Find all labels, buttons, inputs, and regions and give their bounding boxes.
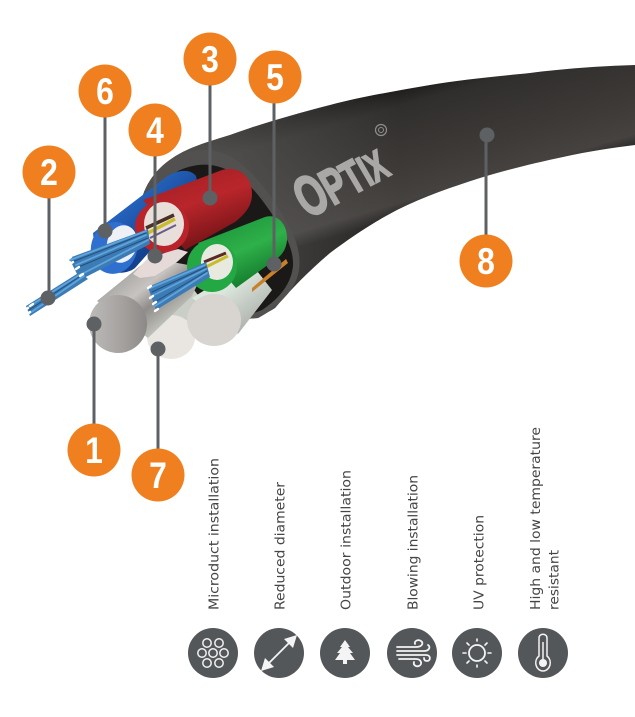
blue tube: [85, 171, 200, 279]
callout 7: [132, 342, 184, 502]
callout 1: [68, 316, 120, 476]
label: UV protection: UV protection: [472, 515, 488, 610]
label: high and low temperature resistant: [528, 427, 562, 610]
callout 4: [128, 104, 182, 264]
callout 6: 6: [96, 72, 114, 113]
label: reduced diameter: Reduced diameter: [272, 482, 288, 610]
silver strength rod: [89, 258, 205, 353]
orange ripcord: [252, 259, 288, 292]
label: high and low temperature resistant: High and low temperature: [528, 427, 544, 610]
OPTIX logo: T: [332, 151, 374, 205]
callout 1: 1: [85, 431, 103, 472]
callout 4: 4: [146, 111, 164, 152]
green tube: [187, 216, 287, 292]
cable interior cavity: [155, 165, 293, 320]
OPTIX logo: [282, 142, 397, 230]
OPTIX logo: X: [357, 142, 397, 191]
OPTIX logo: O: [282, 161, 340, 230]
callout 5: 5: [266, 58, 284, 99]
sheath mouth rim: [143, 150, 300, 320]
callout 2: 2: [40, 153, 58, 194]
label: high and low temperature resistant: resistant: [546, 550, 562, 610]
icon: wind: [387, 628, 437, 678]
label: outdoor installation: Outdoor installation: [338, 470, 354, 610]
red tube: [135, 169, 252, 253]
label: blowing installation: Blowing installation: [406, 475, 422, 610]
icon: thermometer: [518, 628, 568, 678]
registered mark: [376, 124, 386, 136]
OPTIX logo: P: [310, 156, 358, 216]
callout 6: [78, 64, 132, 238]
icon: microduct bundle: [188, 628, 238, 678]
icon: sun: [452, 628, 502, 678]
white rod seven: [147, 285, 210, 359]
white rod: [187, 262, 272, 346]
optical fibres: [25, 229, 210, 316]
callout 7: 7: [149, 456, 167, 497]
foil wrapping: [133, 249, 188, 278]
label: microduct installation: Microduct installation: [206, 458, 222, 610]
callout 3: 3: [201, 40, 219, 81]
callout 8: [460, 128, 512, 288]
icon: diagonal arrow: [254, 628, 304, 678]
callout 8: 8: [477, 242, 495, 283]
callout 5: [248, 50, 302, 272]
callout 2: [22, 146, 76, 306]
icon: tree: [320, 628, 370, 678]
cable sheath: [143, 65, 635, 320]
OPTIX logo: I: [349, 149, 381, 195]
callout 3: [184, 32, 236, 206]
